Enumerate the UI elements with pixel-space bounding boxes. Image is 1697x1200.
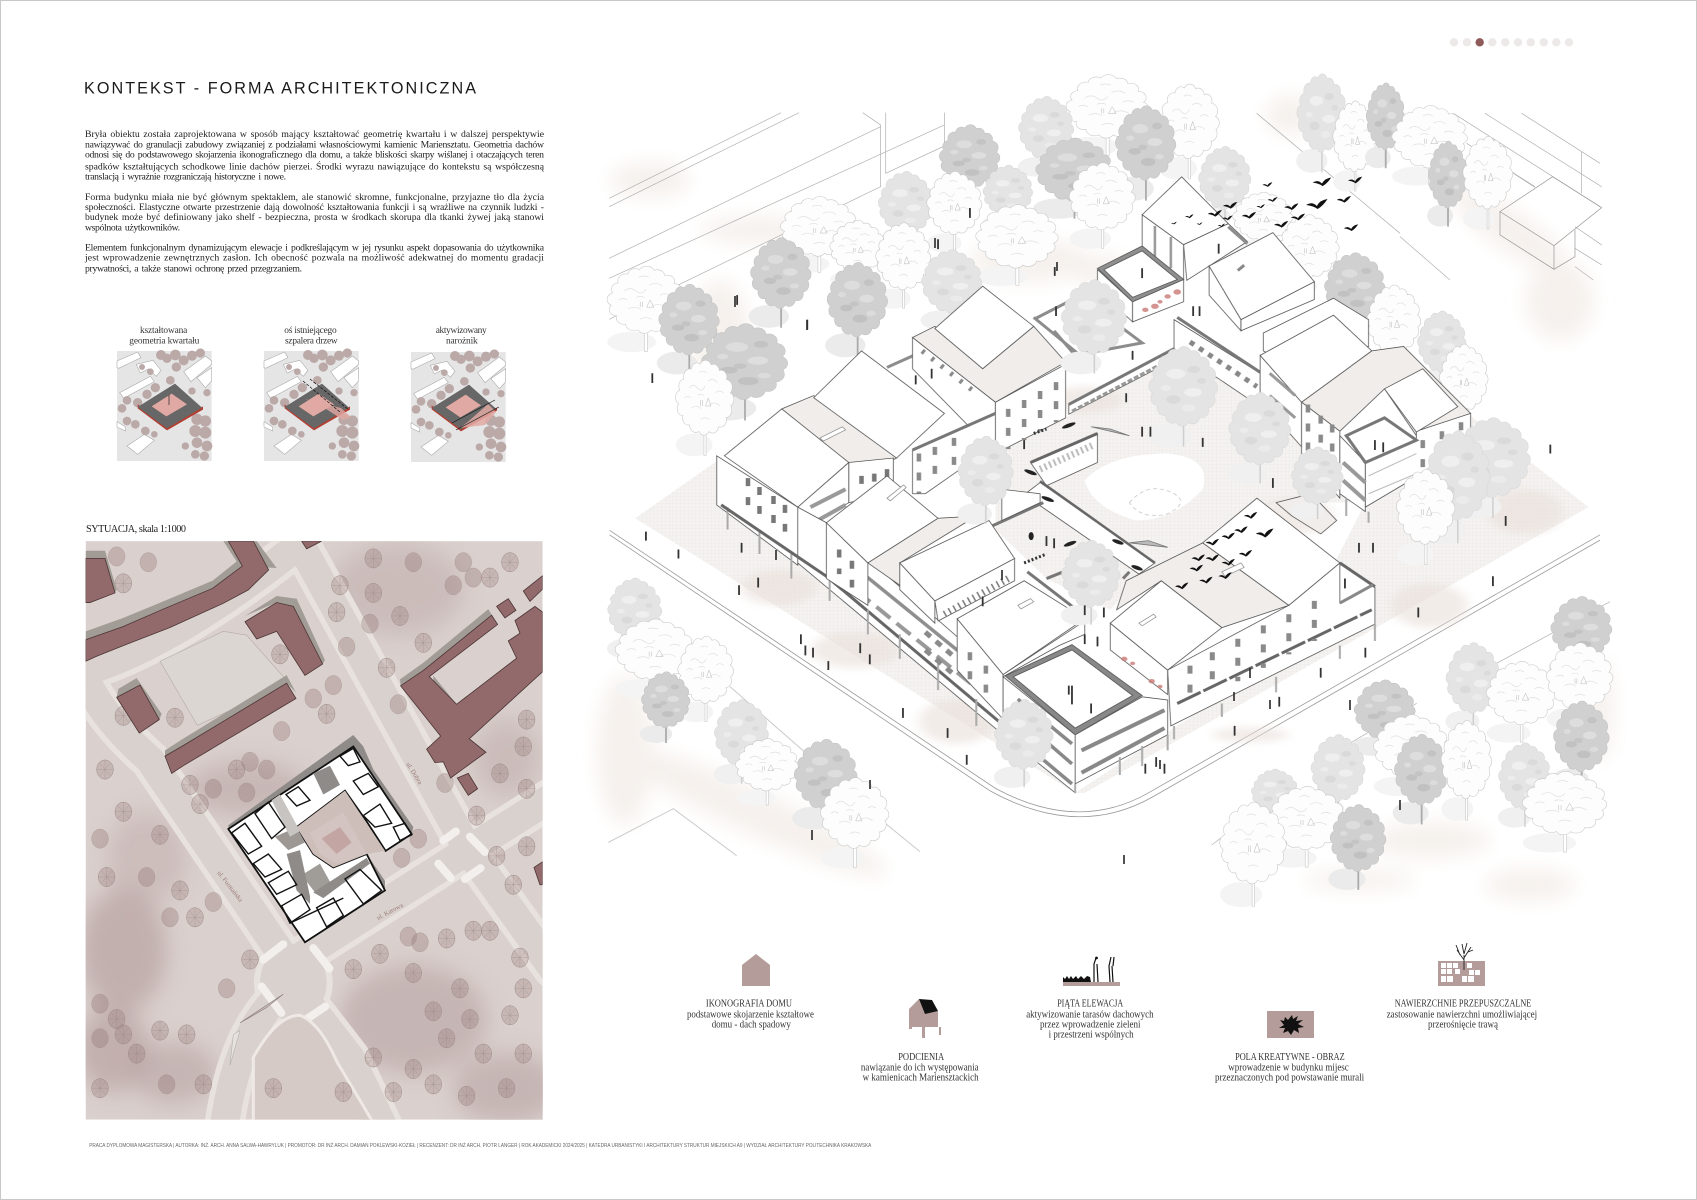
axo: gable H with mural (1110, 581, 1222, 695)
strategy: house iconography: domu - dach spadowy (712, 1020, 791, 1030)
pagination dots (1450, 38, 1573, 46)
diagram: tree alley axis: szpalera drzew (285, 336, 338, 346)
diagram: activated corner: aktywizowany (436, 326, 487, 336)
axo: block A (717, 351, 944, 579)
axo: block B (913, 286, 1066, 454)
axo: east wing (1174, 317, 1260, 407)
axo: upper flock of birds (1171, 177, 1362, 231)
axo: complex (635, 177, 1589, 793)
title: KONTEKST - FORMA ARCHITEKTONICZNA (84, 80, 476, 98)
strategy: fifth elevation: przez wprowadzenie zieleni (1040, 1020, 1141, 1030)
strategy: arcades: nawiązanie do ich występowania (861, 1062, 979, 1074)
map: project footprint (228, 747, 412, 942)
street labels: ul. Dobra (404, 761, 423, 786)
site plan (77, 532, 560, 1134)
axo: trees north (607, 74, 1405, 374)
street labels: ul. Karowa (376, 902, 405, 922)
diagram: geometry of the block (117, 326, 212, 461)
body text: Bryła obiektu została zaprojektowana w sposób mający kształtować geometrię kwartału i w dalszej perspektywie (85, 129, 544, 140)
body text: społeczności. Elastyczne otwarte przestrzenie dają dowolność kształtowania funkcji i są wrażliwe na czynnik ludzki - (85, 202, 544, 213)
axo: gable L (826, 476, 938, 605)
axo: skylights (820, 427, 1244, 626)
axonometric drawing (597, 74, 1614, 907)
diagram: geometry of the block: geometria kwartału (129, 336, 200, 346)
axo: people (646, 208, 1550, 774)
strategy: arcades: w kamienicach Mariensztackich (863, 1072, 979, 1084)
map: streets (77, 532, 553, 1134)
axo: terrace between L and K (868, 516, 976, 585)
axo: gable K (900, 521, 1015, 623)
body text: Elementem funkcjonalnym dynamizującym elewacje i podkreślającym w jej rysunku aspekt dopasowania do użytkownika (85, 243, 545, 254)
body text: nawiązywać do granulacji zabudowy związaniej z podziałami własnościowymi kamienic Mariensztatu. Geometria dachów (85, 139, 544, 150)
strategy: fifth elevation: PIĄTA ELEWACJA (1057, 998, 1123, 1010)
strategy: house iconography: podstawowe skojarzenie kształtowe (687, 1010, 814, 1020)
street labels (215, 761, 423, 922)
strategy: permeable surfaces (1387, 943, 1537, 1030)
map: park colour washes (77, 543, 560, 1123)
axo: scattered people north and south (735, 238, 1400, 864)
axo: trees west and north-east (676, 106, 1512, 456)
strategy: creative fields: wprowadzenie w budynku mijesc (1228, 1062, 1349, 1074)
axo: trees south-east (1220, 597, 1613, 907)
strategy: fifth elevation: aktywizowanie tarasów dachowych (1026, 1010, 1154, 1020)
axo: north pavilion C (1142, 177, 1247, 280)
map: tree canopy (92, 547, 535, 1105)
body text: wspólnota użytkowników. (85, 223, 180, 234)
axo: buildings (717, 177, 1471, 793)
axo: arcade north of courtyard (1069, 349, 1174, 414)
body text: odnosi się do podstawowego skojarzenia ikonograficznego dla domu, a także bliskości skarpy wiślanej i otaczających teren (85, 150, 544, 161)
strategy: fifth elevation: i przestrzeni wspólnych (1049, 1030, 1134, 1040)
diagram: activated corner: narożnik (446, 336, 478, 346)
axo: context outlines (608, 113, 1610, 856)
axo: courtyard and perimeter trees (957, 280, 1530, 788)
axo: lower flock of birds (1175, 512, 1274, 589)
axo: ground washes (597, 95, 1614, 901)
strategy: arcades (861, 999, 979, 1084)
axo: south-east block G (1117, 494, 1375, 739)
axo: terrace F (1302, 346, 1471, 436)
body text (84, 129, 545, 274)
axo: gable J (925, 572, 1091, 719)
axo: trees south-west (607, 578, 889, 868)
body text: Forma budynku miała nie być głównym spektaklem, ale stanowić skromne, funkcjonalne, przyjazne tło dla życia (85, 192, 545, 203)
axo: roads (610, 530, 1600, 817)
strategy: creative fields: przeznaczonych pod powstawanie murali (1215, 1072, 1364, 1084)
street labels: ul. Furmańska (215, 870, 244, 904)
body text: prywatności, a także stanowi ochronę przed przegrzaniem. (85, 263, 302, 274)
strategy: arcades: PODCIENIA (898, 1052, 944, 1063)
site plan heading: SYTUACJA, skala 1:1000 (86, 524, 186, 535)
axo: parapet F (1263, 298, 1369, 373)
axo: gable F (1260, 315, 1372, 498)
axo: inner zigzag wing (992, 427, 1168, 579)
map: existing buildings (86, 541, 543, 885)
axo: terrace block E (1097, 246, 1184, 322)
strategy: fifth elevation (1026, 957, 1154, 1040)
strategy: creative fields: POLA KREATYWNE - OBRAZ (1235, 1052, 1345, 1063)
strategy: creative fields (1215, 1011, 1364, 1084)
map: central island lots (160, 631, 373, 1123)
strategy: house iconography (687, 954, 814, 1030)
body text: translacją i wyraźnie rozgraniczają historyczne i nowe. (85, 172, 286, 183)
strategy: permeable surfaces: zastosowanie nawierzchni umożliwiającej (1387, 1010, 1537, 1020)
axo: mid wing between A and B (913, 413, 995, 494)
axo: hatched plaza (635, 349, 1589, 793)
diagram: tree alley axis (264, 326, 359, 461)
strategy: house iconography: IKONOGRAFIA DOMU (706, 998, 792, 1010)
body text: spadków kształtujących schodkowe linie dachów pierzei. Środki wyrazu nawiązujące do kontekstu są współczesną (85, 160, 545, 172)
strategy: permeable surfaces: NAWIERZCHNIE PRZEPUSZCZALNE (1395, 998, 1531, 1010)
axo: gable F2 and terrace (1340, 369, 1471, 523)
diagram: activated corner (411, 326, 506, 462)
axo: corner terrace I (1003, 645, 1168, 793)
axo: north connector bands (887, 227, 1247, 370)
axo: plaza washes (740, 387, 1563, 744)
axo: south-west long facade (721, 505, 1072, 783)
body text: budynek może być definiowany jako shelf - bezpieczna, prosta w środkach skorupa dla tkanki żywej jaką stanowi (85, 212, 544, 223)
diagram: geometry of the block: kształtowana (140, 326, 188, 336)
concept diagrams (117, 326, 506, 462)
axo: courtyard lawn (1085, 454, 1204, 521)
map: building shadows (86, 541, 520, 756)
axo: gable block D (1209, 233, 1314, 331)
axo: cars and stairs (1023, 421, 1144, 572)
map: project shadow (228, 735, 413, 890)
strategy: permeable surfaces: przerośnięcie trawą (1428, 1020, 1498, 1030)
body text: jest wprowadzenie zewnętrznych zasłon. Ich obecność pozwala na możliwość adekwatnej do momentu gradacji (84, 253, 544, 264)
strategy icons and captions (687, 943, 1537, 1084)
footer credits: PRACA DYPLOMOWA MAGISTERSKA | AUTORKA: INŻ. ARCH. ANNA SALWA-HAWRYLUK | PROMOTOR: DR INŻ ARCH. DAMIAN POKLEWSKI-KOZIEŁ | RECENZENT: DR INŻ ARCH. PIOTR LANGER | ROK AKADEMICKI 2024/2025 | KATEDRA URBANISTYKI I ARCHITEKTURY STRUKTUR MIEJSKICH A9 | WYDZIAŁ ARCHITEKTURY POLITECHNIKA KRAKOWSKA (89, 1142, 872, 1149)
diagram: tree alley axis: oś istniejącego (284, 326, 337, 336)
